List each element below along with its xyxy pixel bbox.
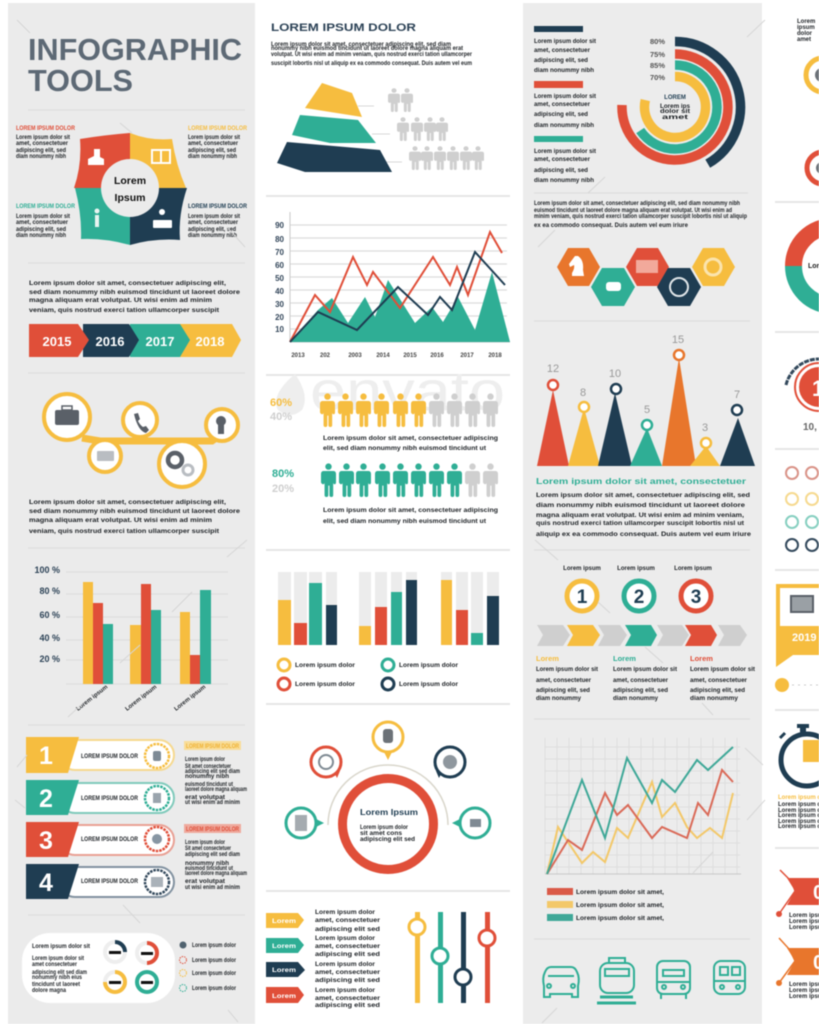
- hexagon cluster: [557, 248, 735, 306]
- line and area chart: [275, 212, 510, 359]
- legend text: red: adipiscing elit, sed: [534, 112, 588, 118]
- text block: yellow heading list: LOREM IPSUM DOLOR: [186, 744, 240, 750]
- tag text: amet, consectetuer: [315, 996, 381, 1002]
- text block: red label: adipiscing elit, sed: [16, 148, 66, 154]
- people row: 60 percent: Lorem ipsum dolor sit amet, consectetuer adipiscing: [323, 435, 498, 442]
- hub text: adipiscing elit sed: [360, 837, 415, 843]
- text block: red label: amet, consectetuer: [16, 141, 69, 147]
- legend text: teal: Lorem ipsum dolor sit: [534, 149, 596, 155]
- donut chart: [794, 227, 819, 306]
- cone chart: 5: [644, 404, 650, 416]
- paragraph: sed diam nonummy nibh euismod tincidunt ut laoreet dolore: [29, 508, 240, 515]
- text block: red label: LOREM IPSUM DOLOR: [16, 126, 76, 132]
- step text: teal: adipiscing elit, sed: [613, 688, 668, 694]
- numbered steps: Lorem ipsum: [674, 566, 712, 572]
- hub node: top: [373, 722, 403, 760]
- white pill panel: Lorem ipsum dolor sit: [32, 956, 84, 962]
- text block: yellow heading list: Lorem ipsum dolor: [185, 757, 225, 763]
- ribbon: red: [776, 870, 819, 931]
- icon chain: [44, 394, 238, 487]
- paragraph: [29, 280, 240, 314]
- paragraph: magna aliquam erat volutpat. Ut wisi enim ad minim veniam,: [536, 512, 744, 519]
- chart legend: Lorem ipsum dolor sit amet,: [576, 890, 664, 896]
- numbered steps: [563, 566, 712, 611]
- center label: Ipsum: [115, 192, 145, 204]
- donut chart: Lor: [808, 263, 819, 270]
- icon: car: [543, 967, 579, 997]
- tag: navy: Lorem: [272, 968, 296, 974]
- text block: teal label: LOREM IPSUM DOLOR: [16, 204, 76, 210]
- numbered row 3: 3: [39, 827, 53, 855]
- text block: yellow heading list: Sit amet consectetuer: [185, 764, 231, 770]
- text block: yellow heading list: erat volutpat: [185, 795, 225, 801]
- icon: ticket: [636, 260, 658, 273]
- radial progress chart: 80%: [650, 37, 665, 46]
- text block: yellow heading list: euismod tincidunt ut: [185, 782, 233, 788]
- legend text: teal: diam nonummy nibh: [534, 178, 594, 184]
- legend text: navy: amet, consectetuer: [534, 48, 591, 54]
- step text: red: diam nonummy: [690, 696, 739, 702]
- tag text: adipiscing elit sed: [315, 952, 380, 958]
- step text: red: Lorem: [690, 654, 713, 663]
- hub text: sit amet cons: [360, 831, 403, 837]
- people row: 80 percent: [272, 463, 498, 525]
- chart legend: Lorem ipsum dolor sit amet,: [576, 916, 664, 922]
- icon: factory: [88, 149, 104, 165]
- step text: yellow: amet, consectetuer: [536, 678, 592, 684]
- paragraph: diam nonummy nibh euismod tincidunt ut laoreet dolore: [536, 502, 745, 509]
- title: [28, 32, 242, 98]
- line and area chart: 2013: [291, 353, 305, 359]
- legend text: red: diam nonummy nibh: [534, 123, 594, 129]
- tag text: [315, 910, 381, 1009]
- ring rows: [786, 467, 818, 551]
- numbered row 2: 2: [39, 785, 53, 813]
- text block top: amet: [797, 37, 811, 43]
- text block: yellow label: [188, 126, 248, 160]
- text block: red label: [16, 126, 76, 160]
- line and area chart: 202: [320, 353, 331, 359]
- paragraph: suscipit lobortis nisl ut aliquip ex ea commodo consequat. Duis autem vel eum: [271, 61, 472, 67]
- timeline arrows 2015-2018: 2018: [196, 334, 224, 349]
- text block: navy label: [188, 204, 248, 239]
- panel: middle column: [255, 0, 523, 1024]
- text block: yellow heading list: ut wisi enim ad minim: [185, 800, 240, 806]
- text block: yellow label: diam nonummy nibh: [188, 154, 237, 160]
- tag text: amet, consectetuer: [315, 970, 381, 976]
- timeline arrows 2015-2018: [29, 324, 241, 357]
- text block: yellow label: LOREM IPSUM DOLOR: [188, 126, 248, 132]
- bar chart legend: Lorem ipsum dolor: [295, 663, 356, 669]
- people row: 80 percent: 80%: [272, 468, 294, 480]
- icon: ticket: [97, 451, 114, 461]
- grid line chart: [545, 738, 741, 874]
- text block: teal label: adipiscing elit, sed: [16, 227, 66, 233]
- bar chart legend: [278, 659, 459, 690]
- text block: yellow heading list: adipiscing elit sed diam: [185, 769, 240, 775]
- text block: red heading list: laoreet dolore magna aliquam: [185, 871, 247, 877]
- icon: tram: [597, 958, 636, 1003]
- line and area chart: 20: [275, 313, 285, 322]
- step text: teal: Lorem ipsum dolor sit: [613, 667, 677, 673]
- text block: navy label: Lorem ipsum dolor sit: [188, 214, 240, 220]
- icon: chess knight: [569, 256, 584, 276]
- bar chart legend: Lorem ipsum dolor: [399, 682, 459, 688]
- step text: teal: amet, consectetuer: [613, 678, 669, 684]
- gauge: 10,: [803, 422, 817, 433]
- radial progress chart: amet: [662, 115, 688, 121]
- numbered row 2: [26, 780, 174, 815]
- icon: walking figure: [94, 208, 100, 227]
- bar chart: percentage: 100 %: [34, 565, 60, 575]
- legend text: red: amet, consectetuer: [534, 102, 591, 108]
- numbered row 1: [26, 737, 174, 773]
- text block: teal label: diam nonummy nibh: [16, 233, 66, 239]
- text block: red heading list: euismod tincidunt ut: [185, 866, 233, 872]
- paragraph: Lorem ipsum dolor sit amet, consectetuer adipiscing elit, sed: [536, 492, 750, 499]
- paragraph: magna aliquam erat volutpat. Ut wisi enim ad minim: [29, 297, 212, 304]
- line and area chart: 90: [275, 221, 285, 230]
- cone chart: 15: [672, 334, 684, 346]
- paragraph: veniam, quis nostrud exerci tation ullamcorper suscipit: [29, 307, 220, 314]
- numbered row 3: LOREM IPSUM DOLOR: [81, 837, 139, 843]
- tag: yellow: Lorem: [272, 919, 296, 925]
- paragraph: Lorem ipsum dolor sit amet, consectetuer adipiscing elit, sed diam: [271, 42, 451, 48]
- paragraph: euismod tincidunt ut laoreet dolore magna aliquam erat volutpat. Ut wisi enim ad: [534, 208, 732, 214]
- icon: bulb: [216, 416, 226, 434]
- text block: yellow heading list: nonummy nibh: [185, 774, 229, 780]
- line and area chart: 60: [275, 261, 285, 270]
- transport icons: [543, 958, 745, 1003]
- text block: yellow label: Lorem ipsum dolor sit: [188, 135, 240, 141]
- hub diagram: [286, 722, 490, 870]
- text block: red heading list: ut wisi enim ad minim: [185, 885, 240, 891]
- people row: 60 percent: [270, 393, 498, 452]
- heading: LOREM IPSUM DOLOR: [271, 22, 416, 34]
- legend text: teal: adipiscing elit, sed: [534, 168, 588, 174]
- step text: yellow: diam nonummy: [536, 696, 582, 702]
- ribbon: orange: [776, 938, 819, 1000]
- text block: navy label: adipiscing elit, sed: [188, 227, 236, 233]
- paragraph: Lorem ipsum dolor sit amet, consectetuer adipiscing elit, sed diam nonummy nibh: [534, 201, 740, 207]
- legend text: red: [534, 81, 596, 129]
- subheading: Lorem ipsum dolor sit amet, consectetuer: [536, 476, 747, 486]
- people row: 60 percent: 40%: [270, 411, 292, 423]
- icon: gears: [168, 453, 193, 475]
- legend text: teal: amet, consectetuer: [534, 157, 591, 163]
- cone chart: 12: [547, 363, 559, 375]
- timeline arrows 2015-2018: 2017: [146, 334, 174, 349]
- hub text: Lorem ipsum dolor: [360, 825, 409, 831]
- tag text: amet, consectetuer: [315, 944, 381, 950]
- step text: red: adipiscing elit, sed: [690, 688, 745, 694]
- numbered row 4: LOREM IPSUM DOLOR: [81, 879, 139, 885]
- paragraph: [534, 201, 747, 229]
- bar chart: percentage: Lorem ipsum: [76, 684, 109, 713]
- panel: right column, cropped: [775, 19, 819, 1000]
- line and area chart: 2015: [403, 353, 417, 359]
- legend text: teal: [534, 136, 596, 184]
- numbered steps: Lorem ipsum: [617, 566, 655, 572]
- text block: red heading list: [184, 824, 247, 891]
- text block: yellow heading list: laoreet dolore magna aliquam: [185, 787, 247, 793]
- icon: presentation board: [152, 150, 170, 163]
- title: TOOLS: [28, 63, 133, 98]
- icon: globe: [670, 278, 688, 296]
- icon circle: red: [807, 152, 819, 184]
- step text: red: amet, consectetuer: [690, 678, 748, 684]
- legend: dots: Lorem ipsum dolor: [192, 971, 237, 977]
- chart legend: [547, 888, 664, 922]
- radial progress chart: 75%: [650, 50, 665, 59]
- line and area chart: 2017: [460, 353, 474, 359]
- paragraph: minim veniam, quis nostrud exerci tation ullamcorper suscipit lobortis nisl ut aliquip: [534, 214, 747, 220]
- text block: navy label: amet, consectetuer: [188, 220, 239, 226]
- bar chart legend: Lorem ipsum dolor: [295, 682, 356, 688]
- step text: teal: [613, 654, 677, 702]
- hub node: upper left: [311, 747, 341, 778]
- people rows: pyramid: [388, 88, 484, 170]
- numbered row 3: [26, 822, 174, 857]
- pinwheel chart: [74, 133, 187, 245]
- tag text: adipiscing elit sed: [315, 1003, 380, 1009]
- tag text: Lorem ipsum dolor: [315, 988, 376, 994]
- numbered steps: 2: [634, 587, 644, 608]
- paragraph: ex ea commodo consequat. Duis autem vel eum iriure: [534, 223, 689, 229]
- paragraph: sed diam nonummy nibh euismod tincidunt ut laoreet dolore: [29, 289, 240, 296]
- text block top: Lorem: [797, 19, 815, 25]
- cone chart: 10: [609, 368, 621, 380]
- line and area chart: 10: [275, 325, 285, 334]
- numbered row 2: LOREM IPSUM DOLOR: [81, 796, 139, 802]
- text block: teal label: Lorem ipsum dolor sit: [16, 214, 70, 220]
- grouped bar charts: [278, 572, 499, 645]
- people row: 60 percent: 60%: [270, 397, 292, 409]
- white pill panel: Lorem ipsum dolor sit: [32, 944, 90, 950]
- sliders: [409, 912, 495, 1003]
- icon: person at desk: [153, 209, 172, 228]
- line and area chart: 40: [275, 287, 285, 296]
- icon: gear: [705, 259, 721, 275]
- white pill panel: [22, 933, 175, 1003]
- people row: 80 percent: 20%: [272, 483, 294, 495]
- bar chart legend: Lorem ipsum dolor: [399, 663, 459, 669]
- yellow card: 2019: [792, 632, 816, 644]
- panel: third column: [523, 3, 762, 1024]
- text block: red heading list: erat volutpat: [185, 879, 225, 885]
- chevron progress bar: [537, 625, 747, 646]
- panel: left column: [8, 3, 255, 1024]
- cone chart: [537, 334, 755, 466]
- donut gauges: [105, 942, 157, 992]
- white pill panel: tincidunt ut laoreet: [32, 982, 80, 988]
- legend text: navy: Lorem ipsum dolor sit: [534, 39, 596, 45]
- icon: phone: [134, 413, 149, 433]
- paragraph: Lorem ipsum dolor sit amet, consectetuer adipiscing elit,: [29, 499, 226, 506]
- step text: red: [690, 654, 755, 702]
- step text: teal: Lorem: [613, 654, 636, 663]
- step text: red: Lorem ipsum dolor sit: [690, 667, 755, 673]
- legend: dots: Lorem ipsum dolor: [192, 986, 237, 992]
- pyramid chart: [277, 83, 402, 172]
- stopwatch text: [778, 795, 819, 830]
- line and area chart: 50: [275, 274, 285, 283]
- text block: yellow heading list: [184, 741, 247, 806]
- bar chart: percentage: Lorem ipsum: [174, 684, 207, 713]
- center label: [114, 175, 146, 204]
- bar chart: percentage: 20 %: [39, 654, 60, 664]
- text block: red label: diam nonummy nibh: [16, 154, 66, 160]
- radial progress chart: [622, 37, 740, 164]
- step text: yellow: adipiscing elit, sed: [536, 688, 590, 694]
- timeline arrows 2015-2018: 2015: [43, 334, 71, 349]
- paragraph: volutpat. Ut wisi enim ad minim veniam, quis nostrud exerci tation ullamcorper: [271, 52, 473, 58]
- cone chart: 7: [734, 389, 740, 401]
- paragraph: [29, 499, 240, 535]
- paragraph: Lorem ipsum dolor sit amet, consectetuer adipiscing elit,: [29, 280, 226, 287]
- numbered row 4: 4: [39, 869, 53, 897]
- numbered steps: 3: [691, 587, 701, 608]
- paragraph: nonummy nibh euismod tincidunt ut laoreet dolore magna aliquam erat: [271, 46, 463, 52]
- numbered steps: Lorem ipsum: [563, 566, 601, 572]
- text block: teal label: [16, 204, 76, 239]
- text block top: [797, 19, 815, 43]
- tag: red: Lorem: [272, 994, 296, 1000]
- numbered row 1: LOREM IPSUM DOLOR: [81, 754, 139, 760]
- bar chart: percentage: 60 %: [39, 610, 60, 620]
- paragraph: magna aliquam erat volutpat. Ut wisi enim ad minim: [29, 517, 212, 524]
- text block: navy label: diam nonummy nibh: [188, 233, 237, 239]
- text block: teal label: amet, consectetuer: [16, 220, 69, 226]
- icon: train: [714, 961, 745, 994]
- yellow card: [775, 584, 819, 692]
- hub text: [360, 808, 418, 843]
- white pill panel: dolore magna: [32, 988, 67, 994]
- cone chart: 3: [702, 422, 708, 434]
- text block top: ipsum: [797, 25, 815, 31]
- tag text: Lorem ipsum dolor: [315, 910, 376, 916]
- radial progress chart: dolor sit: [660, 109, 690, 115]
- numbered row 1: 1: [39, 742, 53, 770]
- text block: red heading list: adipiscing elit sed diam: [185, 852, 240, 858]
- hub node: upper right: [435, 747, 465, 778]
- legend: dots: [180, 942, 237, 992]
- radial progress chart: 85%: [650, 61, 665, 70]
- text block: red heading list: LOREM IPSUM DOLOR: [186, 827, 240, 833]
- icon: cup: [606, 282, 621, 291]
- cone chart: 8: [580, 387, 586, 399]
- text block: red label: Lorem ipsum dolor sit: [16, 135, 70, 141]
- numbered row 4: [26, 864, 174, 899]
- text block: red heading list: nonummy nibh: [185, 861, 229, 867]
- white pill panel: nonummy nibh eius: [32, 975, 83, 981]
- bar chart: percentage: [34, 565, 228, 713]
- line and area chart: 2003: [348, 353, 362, 359]
- tag text: adipiscing elit sed: [315, 927, 380, 933]
- line and area chart: 80: [275, 235, 285, 244]
- step text: teal: diam nonummy: [613, 696, 659, 702]
- text block: navy label: LOREM IPSUM DOLOR: [188, 204, 248, 210]
- timeline arrows 2015-2018: 2016: [96, 334, 124, 349]
- gauge: [786, 359, 819, 433]
- radial progress chart: 70%: [650, 73, 665, 82]
- bar chart: percentage: 40 %: [39, 633, 60, 643]
- white pill panel: amet consectetuer: [32, 962, 78, 968]
- people row: 60 percent: elit, sed diam nonummy nibh euismod tincidunt ut: [323, 445, 487, 452]
- paragraph: quis nostrud exerci tation ullamcorper suscipit lobortis nisl ut: [536, 520, 745, 527]
- numbered steps: 1: [577, 587, 588, 608]
- paragraph: [536, 492, 751, 538]
- legend: dots: Lorem ipsum dolor: [192, 943, 237, 949]
- text block: yellow label: adipiscing elit, sed: [188, 148, 236, 154]
- hub node: left: [286, 808, 324, 838]
- tag text: Lorem ipsum dolor: [315, 962, 376, 968]
- legend text: navy: adipiscing elit, sed: [534, 58, 588, 64]
- tag text: amet, consectetuer: [315, 918, 381, 924]
- text block: yellow label: amet, consectetuer: [188, 141, 239, 147]
- icon: briefcase: [55, 406, 79, 425]
- watermark: envato: [310, 359, 505, 422]
- legend: dots: Lorem ipsum dolor: [192, 958, 237, 964]
- legend text: red: Lorem ipsum dolor sit: [534, 94, 596, 100]
- people row: 80 percent: Lorem ipsum dolor sit amet, consectetuer adipiscing: [323, 507, 498, 514]
- radial progress chart: LOREM: [664, 95, 686, 101]
- line and area chart: 2018: [488, 353, 502, 359]
- stopwatch: [780, 724, 819, 786]
- white pill panel: adipiscing elit sed diam: [32, 970, 87, 976]
- hub text: Lorem Ipsum: [360, 808, 418, 817]
- text block: red heading list: Lorem ipsum dolor: [185, 840, 225, 846]
- line and area chart: 30: [275, 300, 285, 309]
- icon: bus: [657, 961, 690, 999]
- icon circle: yellow: [806, 58, 819, 92]
- paragraph: [271, 42, 473, 67]
- text block top: dolor: [797, 31, 813, 37]
- line and area chart: 2014: [376, 353, 390, 359]
- tag list: [266, 910, 381, 1009]
- step text: yellow: [536, 654, 598, 702]
- radial progress chart: Lorem ips: [660, 104, 691, 110]
- bar chart: percentage: 80 %: [39, 586, 60, 596]
- paragraph: veniam, quis nostrud exerci tation ullamcorper suscipit: [29, 528, 220, 535]
- step text: yellow: Lorem ipsum dolor sit: [536, 667, 598, 673]
- step text: yellow: Lorem: [536, 654, 559, 663]
- tag text: adipiscing elit sed: [315, 978, 380, 984]
- paragraph: aliquip ex ea commodo consequat. Duis autem vel eum iriure: [536, 531, 751, 538]
- line and area chart: 2016: [430, 353, 444, 359]
- people row: 80 percent: elit, sed diam nonummy nibh euismod tincidunt ut: [323, 518, 487, 525]
- center label: Lorem: [114, 175, 146, 187]
- tag text: Lorem ipsum dolor: [315, 936, 376, 942]
- chart legend: Lorem ipsum dolor sit amet,: [576, 903, 664, 909]
- title: INFOGRAPHIC: [28, 32, 242, 67]
- hub node: right: [452, 808, 490, 838]
- legend text: navy: [534, 26, 596, 74]
- legend text: navy: diam nonummy nibh: [534, 68, 594, 74]
- tag: teal: Lorem: [272, 944, 296, 950]
- text block: red heading list: Sit amet consectetuer: [185, 846, 231, 852]
- bar chart: percentage: Lorem ipsum: [125, 684, 158, 713]
- line and area chart: 70: [275, 248, 285, 257]
